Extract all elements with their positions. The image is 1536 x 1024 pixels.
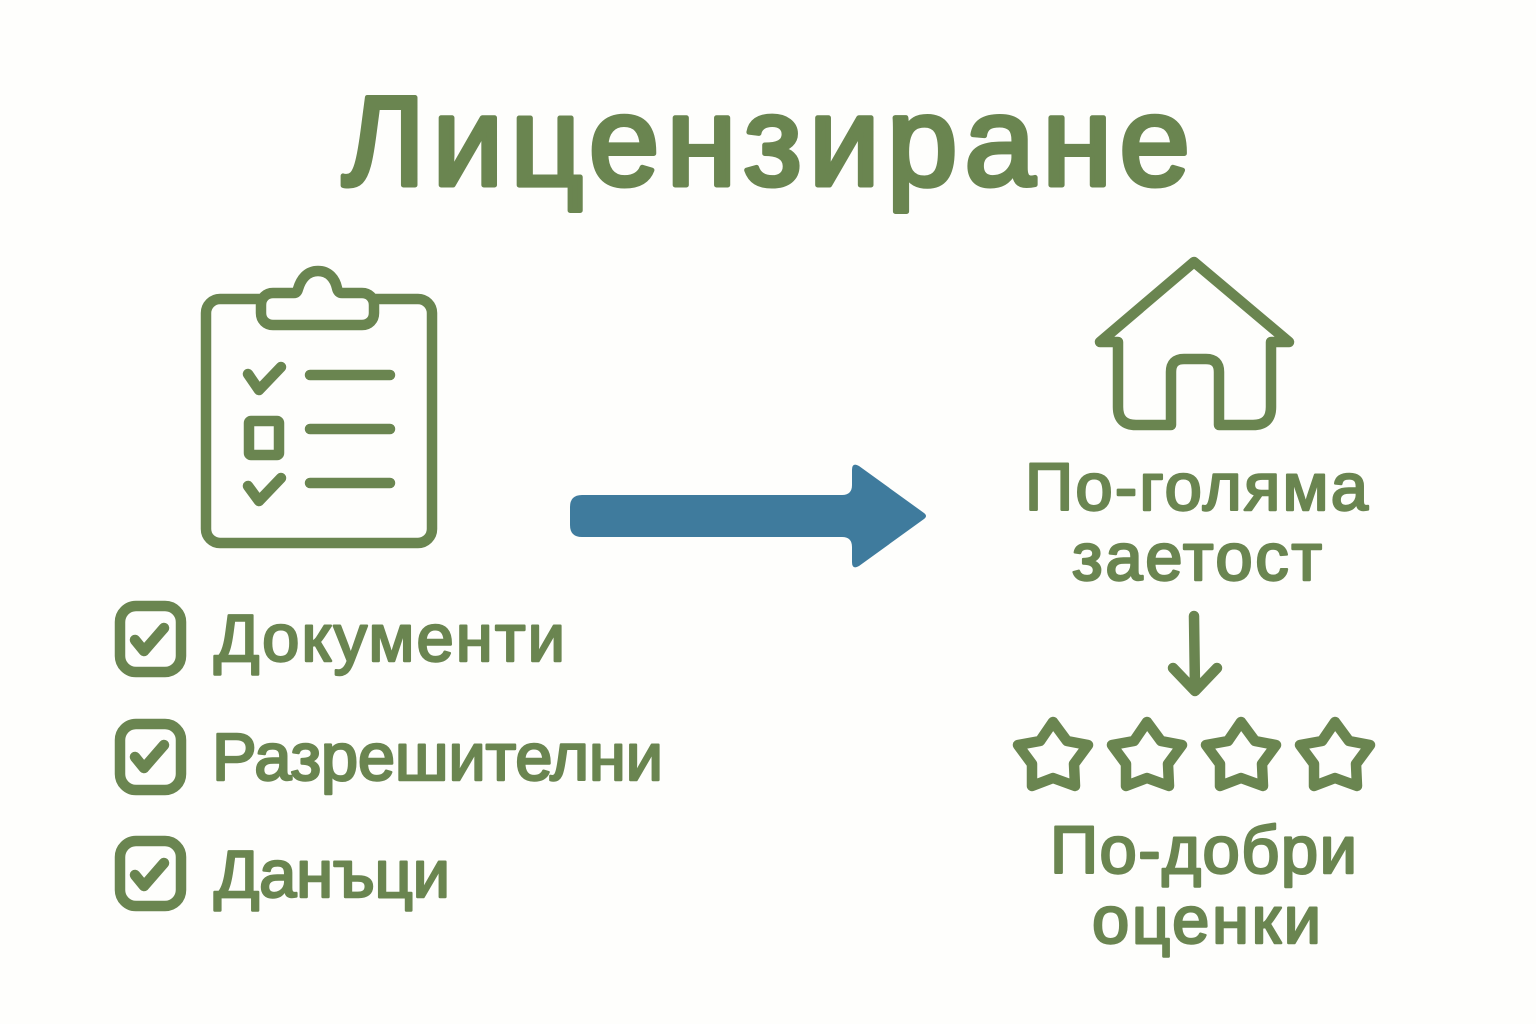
checklist xyxy=(120,601,663,912)
text: greater occupancy: По-голяма xyxy=(1025,450,1369,525)
arrow: main flow xyxy=(570,465,926,567)
icon: clipboard checklist xyxy=(206,271,432,543)
item: Документи: Документи xyxy=(214,601,565,676)
text: greater occupancy xyxy=(1025,450,1369,595)
text: better ratings xyxy=(1050,813,1357,958)
icon: four stars xyxy=(1018,722,1370,786)
item: Разрешителни: Разрешителни xyxy=(212,720,663,795)
item: Данъци: Данъци xyxy=(214,837,450,912)
title: Лицензиране xyxy=(342,70,1190,212)
text: greater occupancy: заетост xyxy=(1072,520,1322,595)
text: better ratings: оценки xyxy=(1092,883,1321,958)
arrow: down xyxy=(1173,616,1217,691)
text: better ratings: По-добри xyxy=(1050,813,1357,888)
icon: house xyxy=(1100,262,1289,425)
